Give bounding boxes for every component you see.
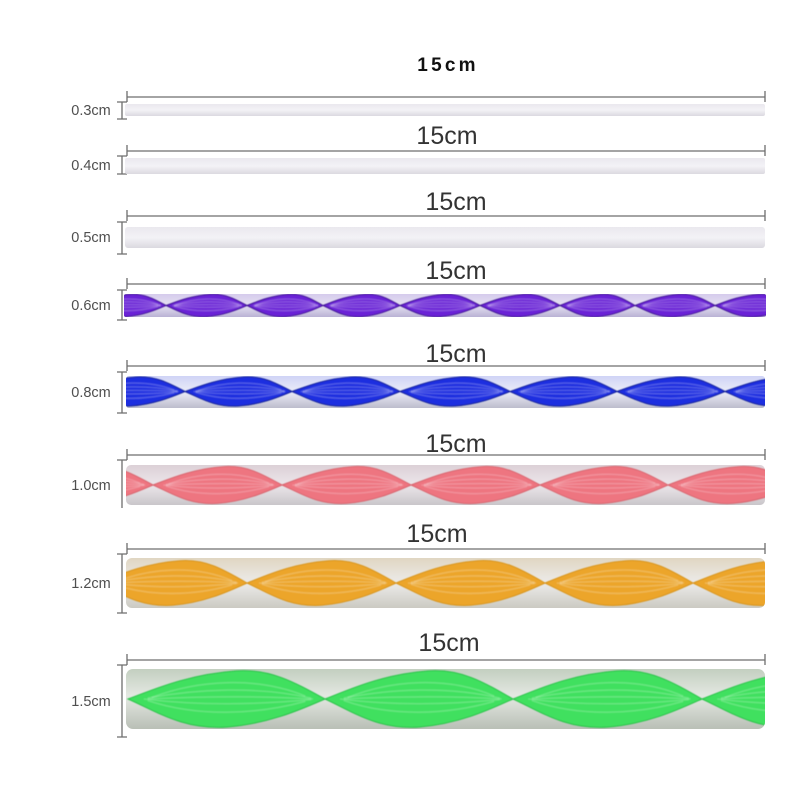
row: 1.5cm green rod [71,629,800,737]
orange twisted rod [98,558,800,608]
length dimension line [127,145,765,156]
length label: 15cm [425,257,487,285]
diameter label: 1.5cm [71,694,111,710]
green twisted rod [126,669,800,729]
diameter label: 0.3cm [71,103,111,119]
row: 0.3cm rod [71,91,765,119]
length dimension line [127,278,765,289]
clear rod [125,104,765,116]
diameter bracket [117,372,127,413]
length dimension line [127,91,765,102]
diameter label: 0.6cm [71,298,111,314]
row: 1.2cm orange rod [71,520,800,613]
row: 1.0cm pink rod [72,434,766,508]
diameter bracket [117,156,127,174]
length dimension line [127,543,765,554]
length label: 15cm [406,520,468,548]
diameter bracket [117,665,127,737]
row: 0.4cm rod [71,122,765,174]
diameter bracket [117,102,127,119]
length label: 15cm [416,122,478,150]
length dimension line [127,210,765,221]
diameter bracket [117,290,127,320]
length dimension line [127,654,765,665]
diameter label: 1.0cm [71,478,111,494]
diameter label: 1.2cm [71,576,111,592]
title: 15cm: 15cm [417,55,479,76]
clear rod [125,227,765,248]
length label: 15cm [425,430,487,458]
row: 0.5cm rod [71,188,765,254]
clear rod [125,158,765,174]
row: 0.6cm purple rod [71,257,795,320]
length label: 15cm [418,629,480,657]
length label: 15cm [425,188,487,216]
length label: 15cm [425,340,487,368]
purple twisted rod [86,294,795,317]
diameter label: 0.8cm [71,385,111,401]
diameter bracket [117,222,127,254]
length dimension line [127,449,765,460]
pink twisted rod [126,465,765,505]
length dimension line [127,360,765,371]
diameter label: 0.4cm [71,158,111,174]
diameter bracket [117,460,127,508]
diameter bracket [117,554,127,613]
row: 0.8cm blue rod [71,340,800,413]
diameter label: 0.5cm [71,230,111,246]
blue twisted rod [126,376,765,408]
